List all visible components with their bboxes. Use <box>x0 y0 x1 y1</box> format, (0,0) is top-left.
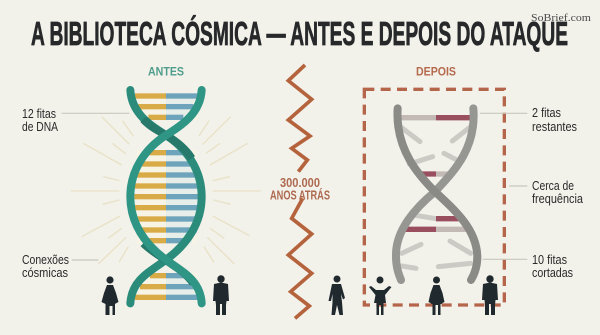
label: 300.000 anos atrás <box>270 175 330 202</box>
panel: antes <box>62 90 261 303</box>
label: cerca de frequência: frequência <box>532 192 583 206</box>
label: 300.000 anos atrás: ANOS ATRÁS <box>270 188 330 202</box>
icon: person centre <box>328 276 345 315</box>
label: 10 fitas cortadas: 10 fitas <box>532 253 567 267</box>
label: conexões cósmicas <box>22 253 69 280</box>
label: 12 fitas de DNA: de DNA <box>22 120 59 134</box>
arrow: top zigzag divider <box>288 65 312 172</box>
icon: woman left <box>102 276 118 315</box>
label: 12 fitas de DNA <box>22 107 59 134</box>
watermark: SoBrief.com <box>531 13 591 24</box>
arrow: bottom zigzag divider <box>288 198 312 318</box>
label: 2 fitas restantes: restantes <box>532 120 577 134</box>
label: conexões cósmicas: cósmicas <box>22 266 68 280</box>
DNA strands: teal <box>130 90 202 303</box>
radiating cosmic connections <box>71 117 261 264</box>
label: 12 fitas leader <box>62 112 129 115</box>
panel: depois <box>364 89 527 305</box>
icon: woman centre <box>428 276 444 315</box>
label: conexões leader <box>72 258 98 262</box>
label: conexões cósmicas: Conexões <box>22 253 69 267</box>
label: cerca de frequência <box>532 179 583 206</box>
label: 2 fitas restantes: 2 fitas <box>532 106 561 120</box>
label: cerca de frequência: Cerca de <box>532 179 574 193</box>
leader lines <box>480 113 527 259</box>
remaining and cut strands <box>401 118 472 268</box>
heading: depois: DEPOIS <box>416 64 456 78</box>
icon: man far right <box>482 275 498 315</box>
DNA strands: grey <box>396 108 477 280</box>
label: 10 fitas cortadas <box>532 253 573 280</box>
DNA rungs: yellow and blue <box>134 93 200 300</box>
label: 2 fitas restantes <box>532 106 577 134</box>
label: 10 fitas cortadas: cortadas <box>532 266 573 280</box>
heading: antes: ANTES <box>148 64 184 78</box>
label: 12 fitas de DNA: 12 fitas <box>22 107 56 121</box>
icon: woman with raised arms <box>369 276 392 315</box>
label: 300.000 anos atrás: 300.000 <box>280 175 320 190</box>
icon: man right <box>213 275 229 315</box>
frequency fence <box>364 89 504 305</box>
